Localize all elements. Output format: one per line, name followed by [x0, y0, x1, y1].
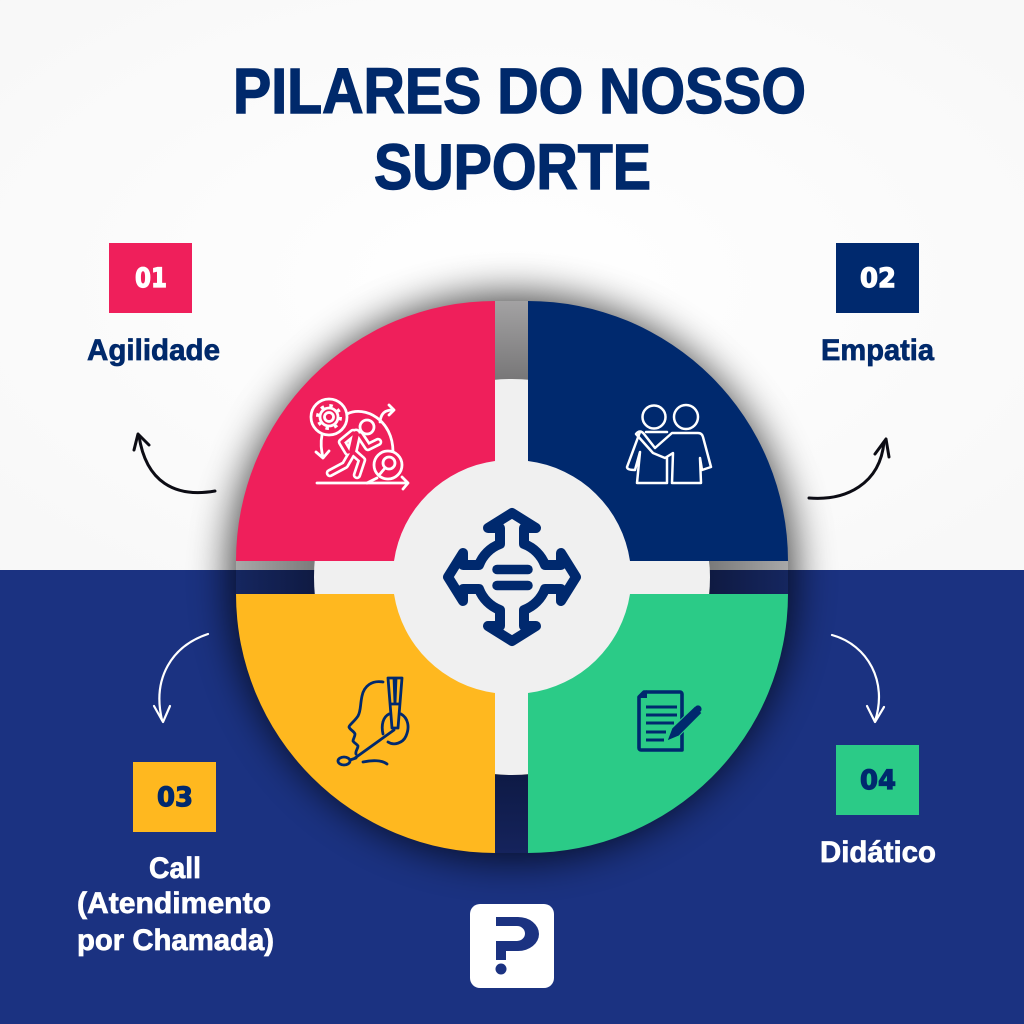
badge 02 and label	[821, 243, 934, 367]
icon: center arrows with equals sign	[448, 513, 576, 641]
badge 01 and label	[87, 243, 220, 367]
wheel gaps shading	[236, 301, 788, 853]
badge 03 and label: por Chamada)	[77, 924, 274, 957]
panel: quadrant 01 pink	[236, 301, 495, 561]
badge 01 and label: 01	[135, 263, 167, 294]
badge 01 and label: Agilidade	[87, 334, 220, 367]
background: lower navy area	[0, 570, 1024, 1024]
badge 03 and label: 03	[157, 782, 193, 813]
arrow: to 04	[832, 635, 884, 722]
panel: quadrant 03 yellow	[236, 594, 495, 853]
badge 03 and label	[77, 762, 274, 957]
wheel base disc	[314, 379, 710, 775]
background: upper white area	[0, 0, 1024, 570]
title: SUPORTE	[374, 131, 651, 203]
icon: runner with gear and magnifier	[311, 399, 408, 489]
panel: quadrant 04 green	[528, 594, 788, 853]
badge 04 and label: 04	[860, 765, 896, 796]
badge 03 and label: (Atendimento	[77, 887, 271, 920]
badge 03 and label: Call	[149, 852, 201, 885]
title	[233, 55, 806, 203]
badge 04 and label: Didático	[820, 836, 936, 869]
icon: headset agent profile	[338, 678, 408, 765]
badge 02 and label: 02	[860, 263, 896, 294]
logo	[470, 904, 554, 988]
drop shadow of the wheel	[229, 294, 795, 860]
icon: document with pencil	[638, 690, 702, 750]
arrow: to 03	[154, 634, 208, 722]
icon: two people embracing	[627, 405, 711, 483]
panel: quadrant 02 navy	[528, 301, 788, 561]
title: PILARES DO NOSSO	[233, 55, 806, 127]
badge 04 and label	[820, 745, 936, 869]
arrow: to 02	[809, 439, 889, 498]
arrow: to 01	[134, 434, 215, 493]
badge 02 and label: Empatia	[821, 334, 934, 367]
